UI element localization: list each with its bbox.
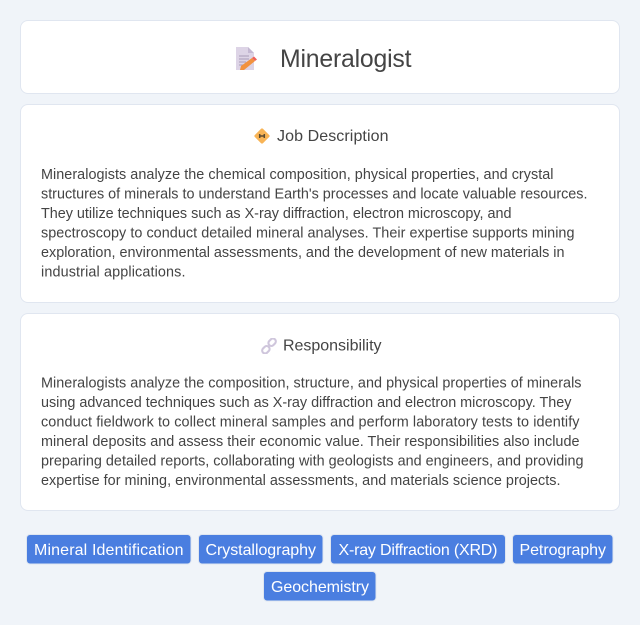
text block: job description: structures of minerals to understand Earth's processes and locate valuable resources. <box>41 186 588 202</box>
title: Mineralogist <box>280 46 412 73</box>
heading: responsibility: Responsibility <box>283 338 382 355</box>
panel: responsibility <box>20 313 620 511</box>
text block: job description: industrial applications. <box>41 264 186 280</box>
tag: Petrography <box>512 534 614 564</box>
text block: job description: exploration, environmental assessments, and the development of new materials in <box>41 244 564 260</box>
text block: responsibility: conduct fieldwork to collect mineral samples and perform laboratory tests to identify <box>41 414 580 430</box>
icon: diamond sign <box>254 128 270 144</box>
text block: job description <box>41 166 588 280</box>
heading: job description: Job Description <box>277 128 388 145</box>
icon: chain link <box>261 338 277 354</box>
text block: responsibility: Mineralogists analyze the composition, structure, and physical properties of minerals <box>41 376 582 392</box>
tag: Mineral Identification: Mineral Identification <box>34 542 184 559</box>
icon: document with pencil <box>236 47 257 70</box>
tag: Mineral Identification <box>26 534 192 564</box>
text block: responsibility: mineral deposits and assess their economic value. Their responsibilities also include <box>41 434 580 450</box>
text block: job description: Mineralogists analyze the chemical composition, physical properties, and crystal <box>41 166 554 182</box>
text block: responsibility: expertise for mining, environmental assessments, and materials science projects. <box>41 473 560 489</box>
tag: Petrography: Petrography <box>520 542 606 559</box>
text block: job description: spectroscopy to conduct detailed mineral analyses. Their expertise supports mining <box>41 225 574 241</box>
panel: job description <box>20 104 620 303</box>
text block: responsibility: preparing detailed reports, collaborating with geologists and engineers, and providing <box>41 454 584 470</box>
tag: X-ray Diffraction (XRD): X-ray Diffraction (XRD) <box>338 542 498 559</box>
panel: title card <box>20 20 620 94</box>
tag: Crystallography <box>198 534 324 564</box>
tag: Geochemistry <box>263 571 376 602</box>
tag: Geochemistry: Geochemistry <box>271 579 369 596</box>
tag: Crystallography: Crystallography <box>206 542 316 559</box>
text block: responsibility <box>41 376 584 489</box>
text block: job description: They utilize techniques such as X-ray diffraction, electron microscopy, and <box>41 206 512 222</box>
text block: responsibility: using advanced techniques such as X-ray diffraction and electron microscopy. They <box>41 395 572 411</box>
tag: X-ray Diffraction (XRD) <box>330 534 506 564</box>
